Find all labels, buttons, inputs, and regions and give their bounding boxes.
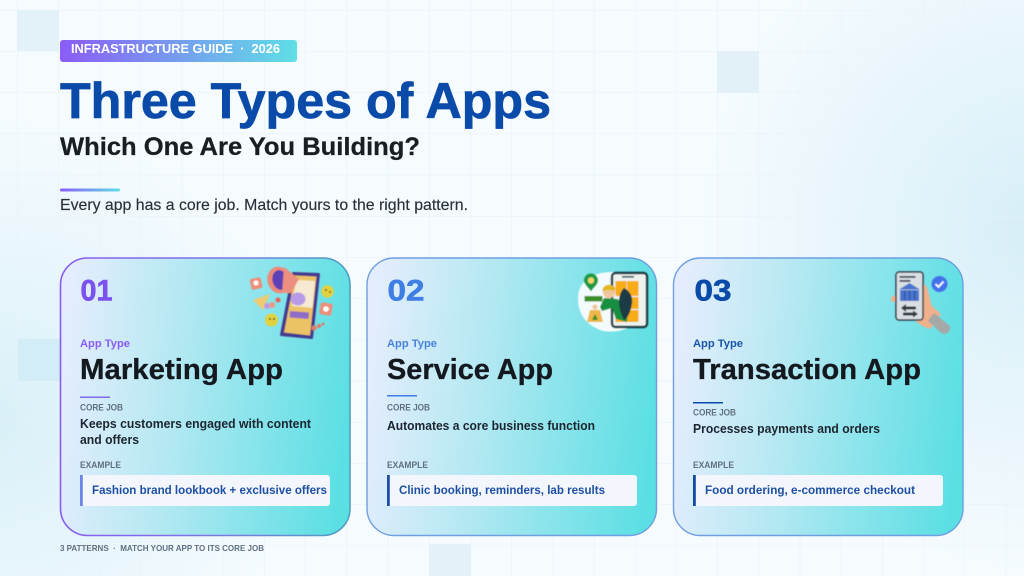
example box: Food ordering, e-commerce checkout — [705, 484, 915, 497]
card rule — [387, 395, 417, 396]
subtitle: Which One Are You Building? — [60, 133, 420, 161]
example label: EXAMPLE — [387, 460, 428, 471]
badge: infrastructure guide: INFRASTRUCTURE GUIDE · 2026 — [71, 42, 280, 56]
core job label: CORE JOB — [80, 402, 123, 414]
core job text: and offers — [80, 432, 139, 447]
eyebrow: App Type — [387, 338, 437, 350]
panel: marketing app — [60, 258, 350, 536]
panel: service app — [367, 258, 656, 536]
core job label: CORE JOB — [387, 402, 430, 414]
card heading: Transaction App — [693, 354, 921, 386]
core job text: Automates a core business function — [387, 418, 595, 433]
core job label: CORE JOB — [693, 408, 736, 418]
card heading: Marketing App — [80, 354, 283, 386]
example label: EXAMPLE — [80, 460, 121, 471]
example box — [80, 475, 330, 506]
number 03: 03 — [694, 274, 732, 308]
example box: Fashion brand lookbook + exclusive offers — [92, 484, 327, 497]
card rule — [693, 402, 723, 404]
footer note: 3 PATTERNS · MATCH YOUR APP TO ITS CORE JOB — [60, 543, 264, 553]
number 02: 02 — [388, 274, 424, 308]
core job text: Keeps customers engaged with content — [80, 416, 312, 431]
example label: EXAMPLE — [693, 460, 734, 471]
badge: infrastructure guide — [60, 40, 297, 62]
core job text: Processes payments and orders — [693, 421, 880, 436]
tagline: Every app has a core job. Match yours to the right pattern. — [60, 197, 468, 214]
icon: hand holding banking phone — [891, 272, 950, 334]
eyebrow: App Type — [693, 338, 743, 350]
eyebrow: App Type — [80, 338, 130, 350]
icon: delivery courier in phone — [578, 272, 647, 332]
card heading: Service App — [387, 354, 553, 386]
card rule — [80, 396, 110, 398]
example box — [693, 475, 943, 506]
number 01: 01 — [80, 274, 112, 308]
title: Three Types of Apps — [60, 73, 551, 129]
panel: transaction app — [674, 258, 963, 536]
icon: marketing phone and megaphone — [250, 264, 334, 338]
example box — [387, 475, 637, 506]
example box: Clinic booking, reminders, lab results — [399, 484, 605, 497]
accent rule — [60, 188, 120, 192]
core job text — [80, 416, 312, 447]
